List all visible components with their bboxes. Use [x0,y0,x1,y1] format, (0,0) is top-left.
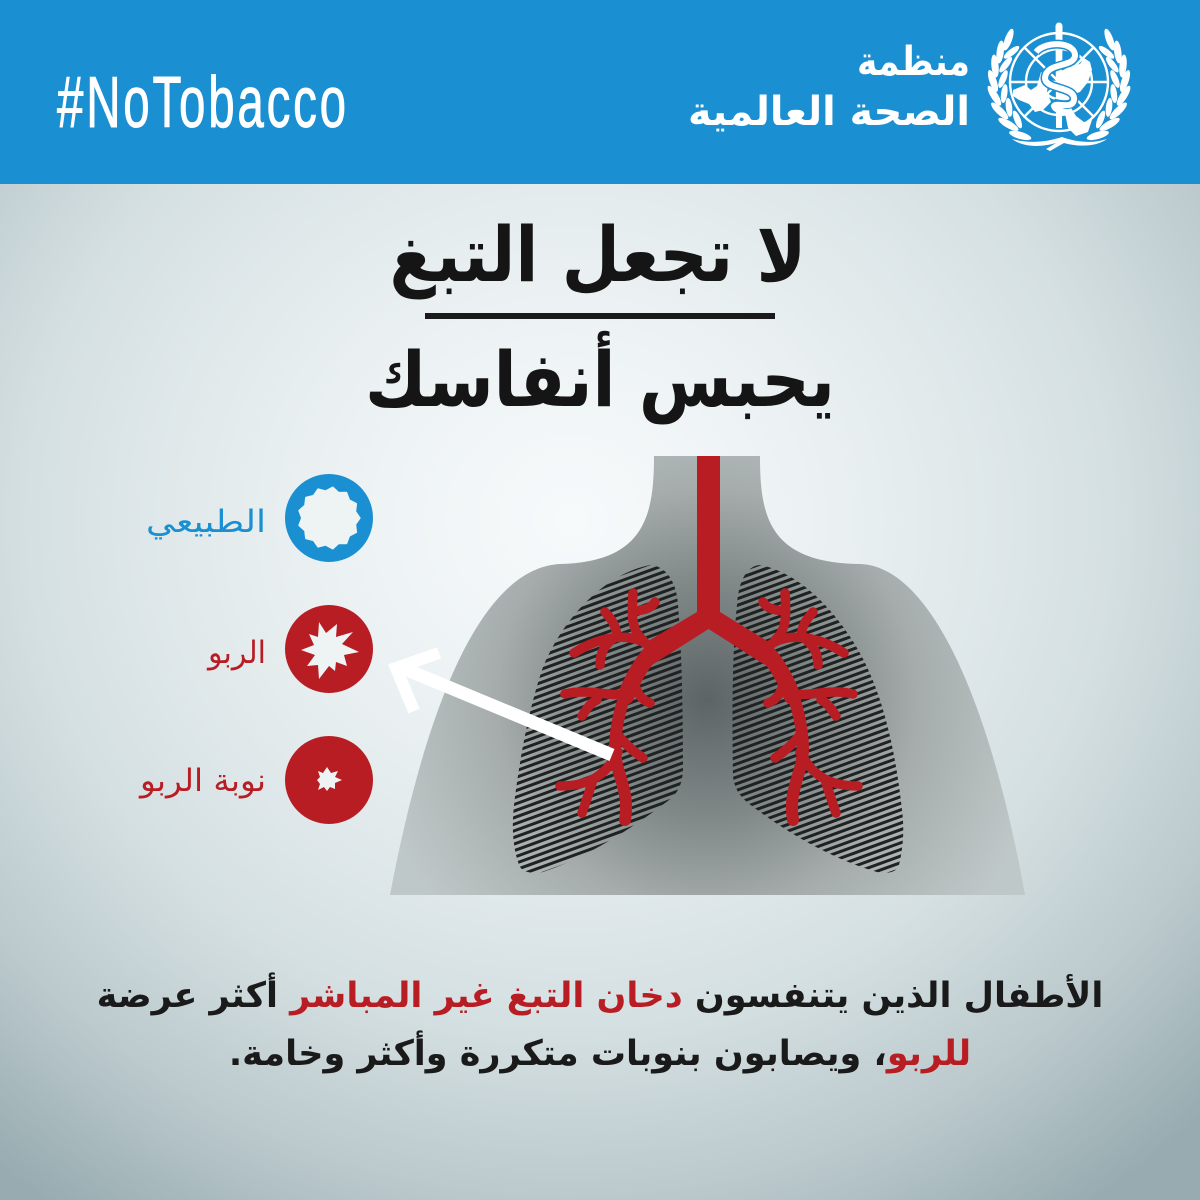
icon: asthma airway [285,605,373,693]
snake [1036,44,1075,116]
left bronchial tree [560,593,655,820]
organisation name: منظمة [857,39,970,85]
laurel left [985,28,1032,142]
organisation name [688,39,970,135]
trachea and main bronchi [650,456,767,665]
hashtag: #NoTobacco [57,62,346,142]
heading line 2: يحبس أنفاسك [365,330,835,424]
heading divider [425,313,775,319]
icon: asthma attack airway [285,736,373,824]
arrow [396,653,612,755]
globe [1010,33,1108,131]
continents [1013,58,1092,136]
header band [0,0,1200,184]
organisation name: الصحة العالمية [688,89,970,135]
left lung [512,565,683,872]
body text line 2: للربو، ويصابون بنوبات متكررة وأكثر وخامة. [229,1034,971,1074]
label: asthma: الربو [206,635,266,671]
icon: normal airway [285,474,373,562]
snake outline [1036,44,1075,105]
ribbon [1012,137,1107,151]
right lung [732,565,904,873]
heading line 1: لا تجعل التبغ [390,210,806,300]
laurel right [1086,28,1133,142]
lungs diagram [390,456,1025,895]
icon: WHO emblem [985,22,1133,151]
label: normal: الطبيعي [146,504,266,540]
torso silhouette [390,456,1025,895]
staff [1056,22,1062,128]
body text line 1: الأطفال الذين يتنفسون دخان التبغ غير المباشر أكثر عرضة [97,976,1103,1016]
right bronchial tree [763,593,858,820]
label: asthma attack: نوبة الربو [138,763,266,799]
